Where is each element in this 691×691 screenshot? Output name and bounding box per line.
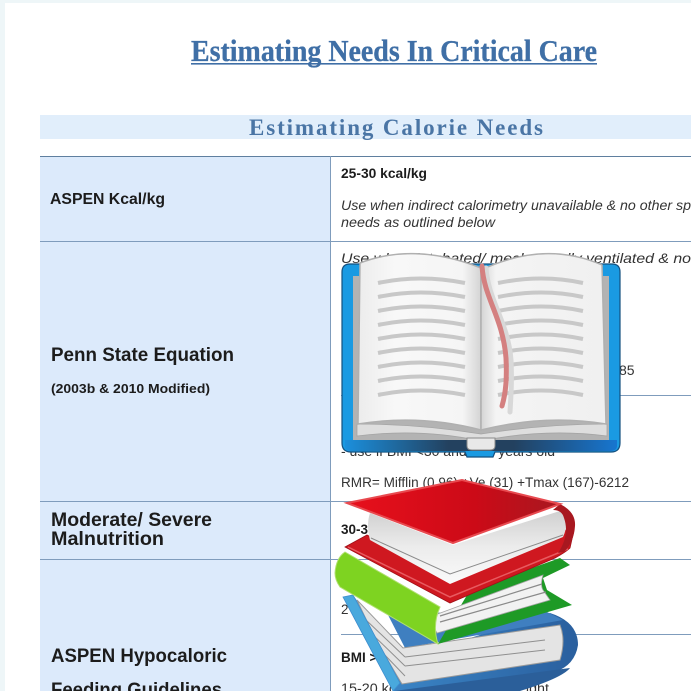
cell: Penn State text [341,250,691,490]
row label: ASPEN Kcal/kg: ASPEN Kcal/kg [50,191,165,208]
row label: ASPEN Hypocaloric Feeding Guidelines: ASPEN Hypocaloric [51,646,227,667]
cell: hypocaloric text: BMI >30 [341,650,392,665]
left page [358,254,481,430]
cell: hypocaloric text [341,602,549,691]
row label: Moderate/ Severe Malnutrition: Moderate/ Severe [51,510,212,531]
cell: malnutrition text: 30-35 [341,522,376,537]
table [40,156,691,691]
cell: ASPEN kcal text [341,166,691,230]
row label: Moderate/ Severe Malnutrition: Malnutrition [51,529,164,550]
cell: ASPEN kcal text: needs as outlined below [341,215,496,230]
cell: hypocaloric text: 2 [341,602,349,617]
icon: open book [342,254,620,457]
cell: Penn State text: Use when intubated/ mechanically ventilated & no [341,250,691,266]
row label: Penn State Equation: (2003b & 2010 Modified) [51,381,210,396]
left column background [40,156,330,691]
right page [481,254,606,430]
cell: Penn State text: RMR= Mifflin (0.96) +Ve (31) +Tmax (167)-6212 [341,474,629,490]
green book [335,552,572,644]
pages [368,510,566,584]
section heading: Estimating Calorie Needs: Estimating Calorie Needs [249,115,543,140]
bottom cover [345,530,574,603]
row label: Moderate/ Severe Malnutrition [51,510,212,550]
row label: Penn State Equation: Penn State Equation [51,345,234,366]
red book [345,480,575,603]
text lines [378,278,583,395]
top cover [347,480,560,543]
page stack [353,276,609,440]
ribbon bookmark [482,266,511,412]
cell: Penn State text: - use if BMI <30 and <60 years old [341,444,555,459]
row label: Penn State Equation [51,345,234,396]
row label: ASPEN Hypocaloric Feeding Guidelines [51,646,227,691]
spine tab [467,438,495,450]
cell: Penn State text: 85 [619,362,635,378]
blue book [343,595,578,691]
title: Estimating Needs In Critical Care [191,33,597,68]
spine [553,504,575,553]
cell: ASPEN kcal text: 25-30 kcal/kg [341,166,427,181]
icon: stack of books [335,480,578,691]
section heading: Estimating Calorie Needs [40,115,691,140]
book cover [342,264,620,457]
cell: ASPEN kcal text: Use when indirect calorimetry unavailable & no other sp [341,198,691,213]
